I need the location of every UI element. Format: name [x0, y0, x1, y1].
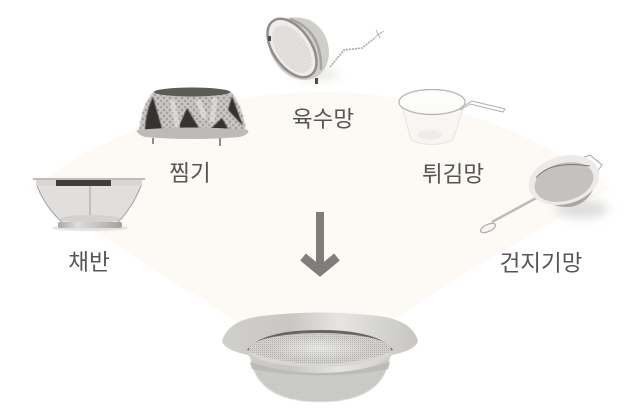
- icon: handled strainer (건지기망): [479, 148, 608, 235]
- background fan shape: [30, 92, 610, 322]
- label: 채반: 채반: [68, 250, 110, 275]
- label: 튀김망: 튀김망: [422, 162, 484, 187]
- icon: tea ball strainer (육수망): [258, 10, 384, 86]
- arrow: down: [303, 212, 337, 271]
- icon: steamer (찜기): [137, 88, 248, 146]
- icon: mesh strainer bowl (main): [222, 312, 418, 402]
- icon: colander (채반): [33, 178, 145, 231]
- label: 건지기망: 건지기망: [500, 251, 582, 276]
- label: 찜기: 찜기: [169, 161, 211, 186]
- label: 육수망: 육수망: [292, 107, 354, 132]
- icon: frying basket (튀김망): [399, 90, 505, 144]
